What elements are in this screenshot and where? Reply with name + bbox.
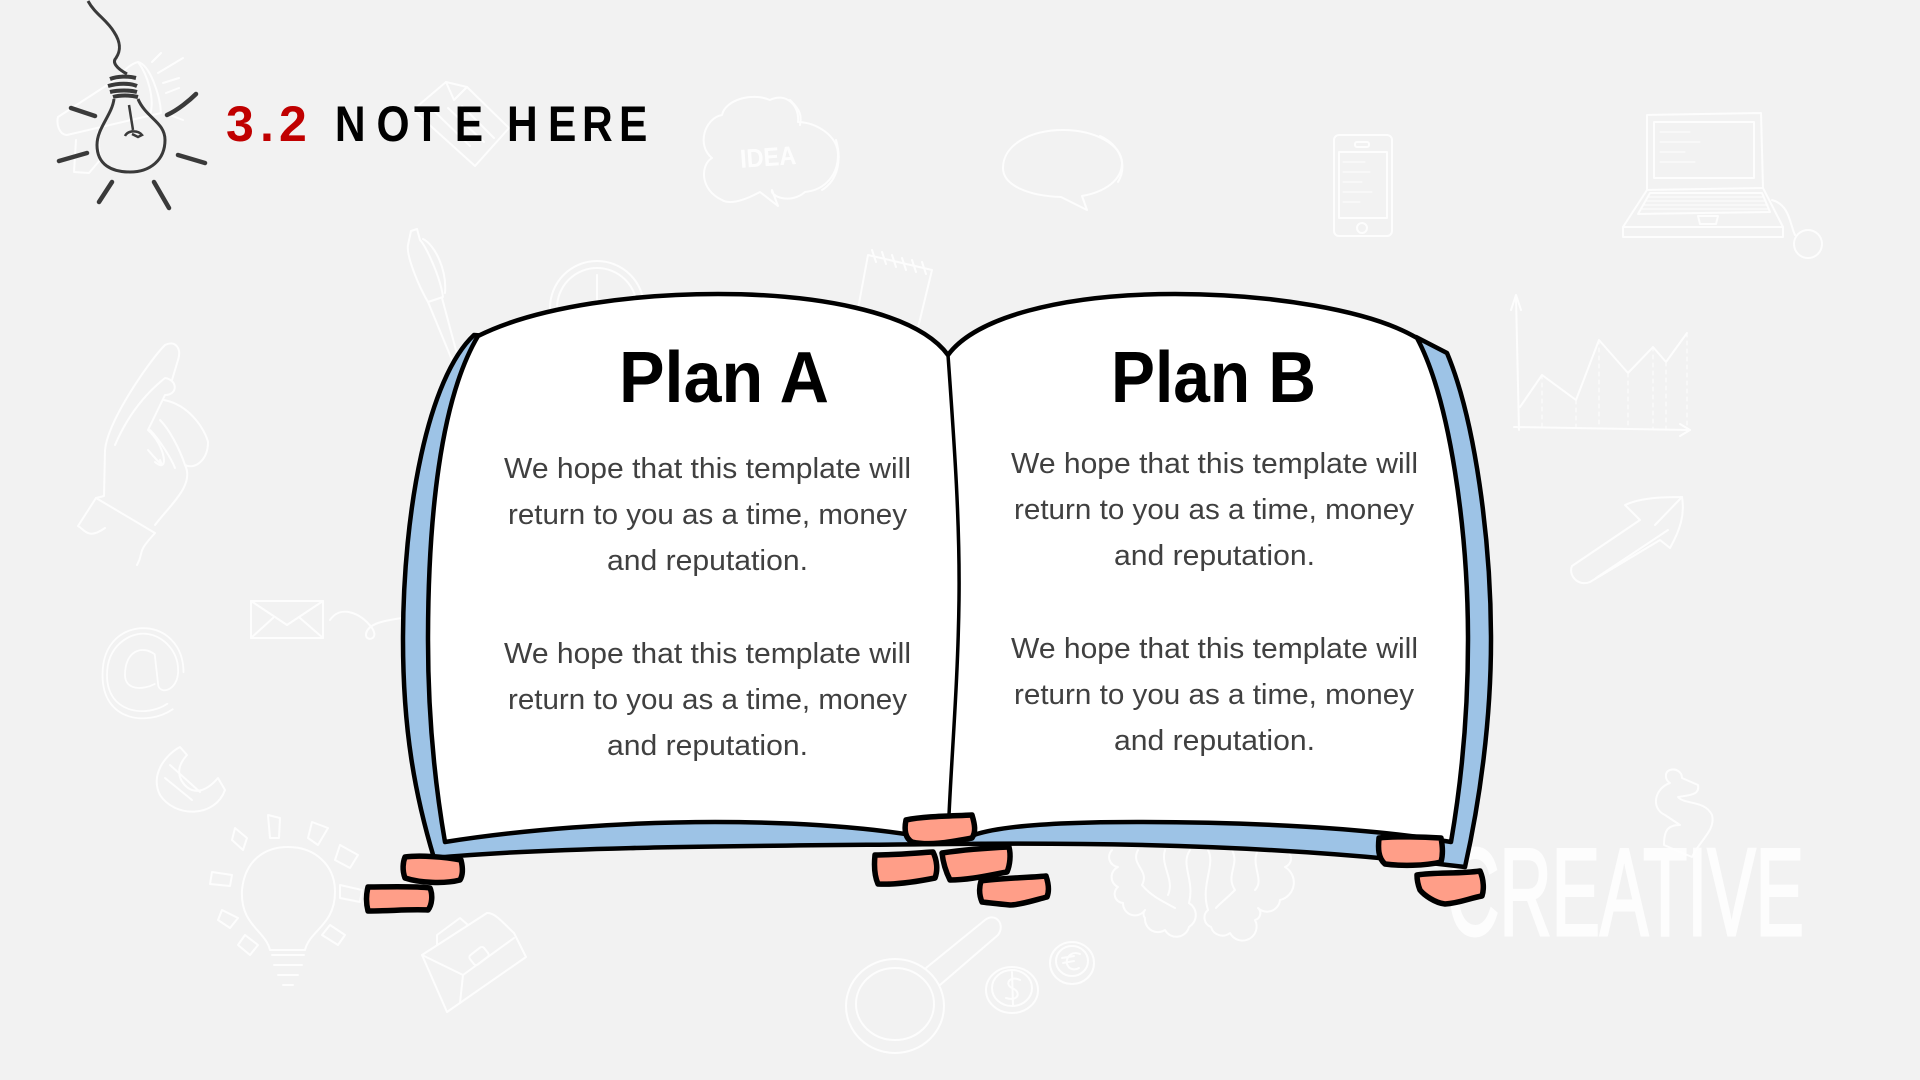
title number: 3.2 <box>226 96 307 152</box>
icon: magnifying glass <box>846 917 1001 1053</box>
icon: pen <box>408 229 457 360</box>
text block: plan a second paragraph: We hope that this template will <box>504 638 911 670</box>
bulb glass <box>97 99 165 172</box>
bulb filament <box>125 105 142 137</box>
icon: hanging light bulb <box>59 1 205 208</box>
brick: right lower <box>1417 871 1483 904</box>
text block: plan b first paragraph <box>1011 448 1418 572</box>
icon: clock <box>550 261 644 355</box>
text block: plan b second paragraph: return to you as a time, money <box>1014 679 1415 711</box>
bulb rays <box>59 94 205 208</box>
icon: light bulb <box>210 815 362 985</box>
bulb wire <box>88 1 127 74</box>
text block: plan b first paragraph: We hope that this template will <box>1011 448 1418 480</box>
text block: plan a first paragraph: return to you as a time, money <box>508 499 908 531</box>
text block: plan a second paragraph: and reputation. <box>607 730 808 762</box>
icon: envelope with squiggle <box>251 601 402 639</box>
panel: plan b <box>1011 338 1418 757</box>
book spine <box>948 355 959 815</box>
text block: plan a first paragraph: and reputation. <box>607 545 808 577</box>
title <box>226 96 647 152</box>
text block: plan b first paragraph: and reputation. <box>1114 540 1315 572</box>
icon: euro coin <box>1050 942 1094 984</box>
brick: spine left <box>874 852 937 884</box>
icon label: idea: IDEA <box>739 140 797 174</box>
icon: brain <box>1109 850 1294 941</box>
bulb cap <box>108 77 138 97</box>
text block: plan b second paragraph: and reputation. <box>1114 725 1315 757</box>
panel: plan a <box>504 338 911 762</box>
icon: phone <box>1334 135 1392 236</box>
text block: plan a first paragraph <box>504 453 911 577</box>
text block: plan a first paragraph: We hope that this template will <box>504 453 911 485</box>
icon: speech bubble <box>1003 130 1122 210</box>
text block: plan a second paragraph <box>504 638 911 762</box>
icon: laptop and mouse <box>1623 113 1822 258</box>
icon: euro sign <box>157 747 225 812</box>
heading: plan b: Plan B <box>1111 338 1316 418</box>
text block: plan b second paragraph: We hope that this template will <box>1011 633 1418 665</box>
icon: at sign <box>102 628 184 718</box>
text block: plan a second paragraph: return to you as a time, money <box>508 684 908 716</box>
title words: NOTE HERE <box>335 96 647 152</box>
text block: plan b first paragraph: return to you as a time, money <box>1014 494 1415 526</box>
book cover <box>403 335 1491 867</box>
icon: pointing hand <box>78 343 208 565</box>
heading: plan a: Plan A <box>619 338 829 418</box>
brick: left lower <box>366 887 432 911</box>
brick: spine top <box>905 815 975 844</box>
icon: document <box>413 82 509 166</box>
brick: right upper <box>1379 837 1442 865</box>
brick: spine right <box>942 847 1010 880</box>
icon: line chart <box>1511 295 1690 436</box>
icon: briefcase <box>422 913 526 1012</box>
brick: spine lower <box>980 876 1048 905</box>
icon: megaphone <box>57 53 183 173</box>
icon: dollar coin <box>986 967 1038 1013</box>
bricks <box>366 815 1483 911</box>
icon: dollar sign <box>1656 769 1713 857</box>
icon: idea cloud <box>704 97 839 206</box>
open book <box>403 294 1491 867</box>
book pages <box>428 294 1468 843</box>
brick: left upper <box>403 856 462 882</box>
text block: plan b second paragraph <box>1011 633 1418 757</box>
icon: notepad <box>855 250 932 340</box>
icon: arrow <box>1571 497 1683 583</box>
